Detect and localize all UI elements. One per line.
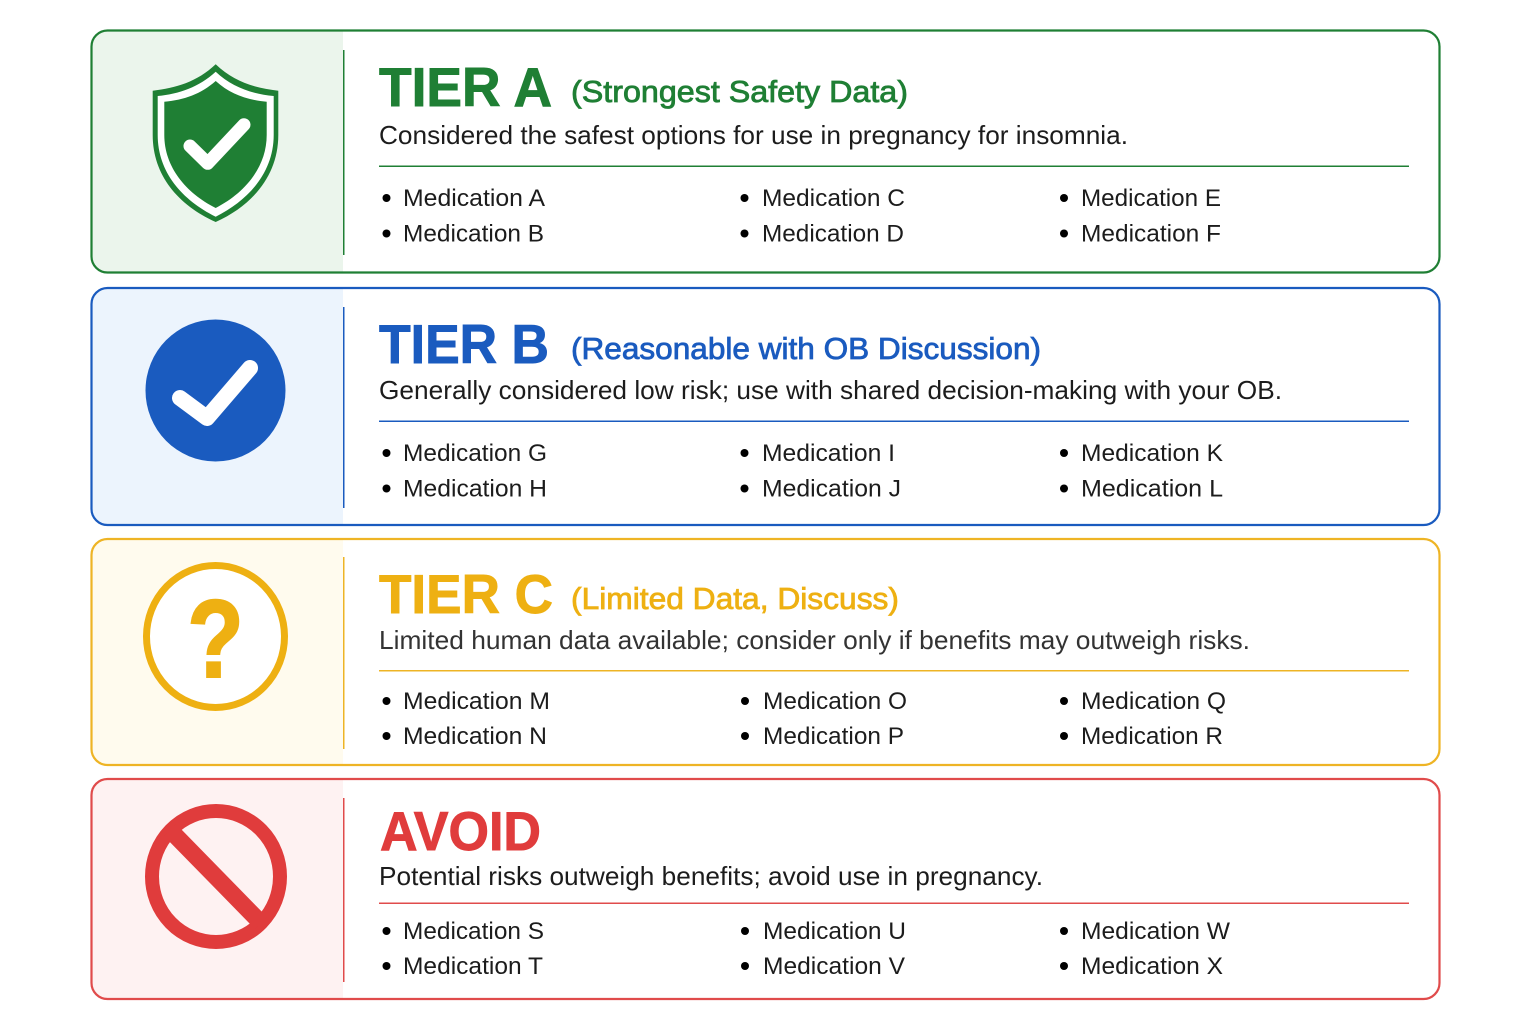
heading: Tier B: TIER B [379, 313, 549, 375]
icon: blue circle with check mark [146, 320, 286, 462]
medication list: Tier A: Medication B [403, 220, 544, 248]
medication list: Tier A: Medication F [1081, 220, 1221, 248]
medication list: Tier B: Medication J [762, 476, 901, 502]
medication list: Tier C: Medication N [403, 723, 547, 750]
icon: amber circle with question mark [146, 566, 284, 708]
medication list: Tier B: Medication H [403, 476, 547, 502]
medication list: Avoid: Medication T [403, 953, 543, 980]
heading: Tier A: TIER A [379, 56, 552, 118]
medication list: Tier C: Medication R [1081, 723, 1223, 750]
medication list: Tier B: Medication I [762, 440, 895, 467]
medication list: Tier C: Medication O [763, 688, 907, 715]
panel: Tier C [92, 539, 1440, 765]
medication list: Avoid: Medication W [1081, 918, 1230, 945]
subheading: Tier C: (Limited Data, Discuss) [571, 581, 899, 616]
medication list: Avoid: Medication V [763, 953, 905, 980]
medication list: Avoid [382, 918, 1230, 980]
medication list: Tier B: Medication K [1081, 440, 1223, 467]
panel: Tier B [92, 288, 1440, 525]
description: Avoid: Potential risks outweigh benefits; avoid use in pregnancy. [379, 861, 1043, 891]
medication list: Avoid: Medication X [1081, 953, 1223, 980]
icon: green shield with check mark [153, 64, 278, 222]
description: Tier B: Generally considered low risk; use with shared decision-making with your OB. [379, 375, 1282, 405]
medication list: Tier C [382, 688, 1226, 750]
medication list: Tier A: Medication D [762, 220, 904, 248]
medication list: Tier A: Medication A [403, 185, 545, 212]
description: Tier A: Considered the safest options for use in pregnancy for insomnia. [379, 120, 1128, 150]
medication list: Avoid: Medication U [763, 918, 906, 945]
medication list: Tier B [382, 440, 1223, 502]
subheading: Tier A: (Strongest Safety Data) [571, 74, 908, 109]
medication list: Tier A [382, 185, 1221, 248]
medication list: Avoid: Medication S [403, 918, 544, 945]
panel: Tier A [92, 30, 1440, 272]
medication list: Tier B: Medication G [403, 440, 547, 467]
medication list: Tier C: Medication Q [1081, 688, 1226, 715]
icon: amber circle with question mark: ? [187, 577, 244, 701]
medication list: Tier C: Medication P [763, 723, 904, 750]
heading: Avoid: AVOID [380, 800, 541, 862]
heading: Tier C: TIER C [379, 563, 553, 625]
medication list: Tier C: Medication M [403, 688, 550, 715]
medication list: Tier B: Medication L [1081, 476, 1223, 502]
description: Tier C: Limited human data available; consider only if benefits may outweigh risks. [379, 625, 1250, 655]
medication list: Tier A: Medication E [1081, 185, 1221, 212]
panel: Avoid [92, 779, 1440, 999]
medication list: Tier A: Medication C [762, 185, 905, 212]
icon: red prohibition sign [152, 811, 280, 942]
subheading: Tier B: (Reasonable with OB Discussion) [571, 331, 1041, 366]
